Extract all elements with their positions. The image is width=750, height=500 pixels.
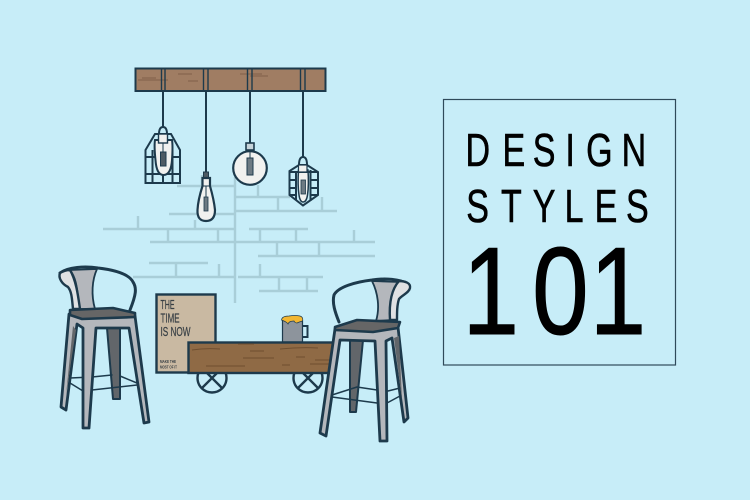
right stool rungs (332, 387, 400, 403)
hanging lamp: slim bulb (197, 91, 215, 221)
hanging lamp: round cage bulb (290, 91, 318, 206)
poster headline: THE (160, 298, 174, 312)
right stool seat (335, 320, 400, 332)
right stool frame and legs (320, 327, 408, 441)
right stool back leg (350, 340, 363, 412)
brick wall (103, 175, 375, 303)
mug with foam (282, 316, 308, 342)
hanging lamp: globe bulb (233, 91, 267, 185)
left stool frame and legs (61, 314, 149, 428)
poster small print: MOST OF IT (160, 364, 177, 370)
title: styles: STYLES (466, 180, 649, 232)
right cart wheel (294, 364, 322, 392)
title: design: DESIGN (465, 124, 646, 176)
title: 101: 101 (462, 222, 646, 361)
right stool backrest (333, 279, 408, 322)
hanging lamp: caged bulb left (146, 91, 180, 183)
poster small print (160, 359, 177, 370)
poster (156, 294, 216, 372)
left cart wheel (198, 364, 226, 392)
right bar stool (320, 279, 410, 441)
poster headline: IS NOW (160, 325, 191, 339)
wooden cart table (188, 342, 334, 373)
poster headline (160, 298, 191, 339)
title box (444, 100, 676, 365)
left stool rungs (70, 375, 137, 391)
left stool backrest (60, 267, 135, 310)
poster headline: TIME (160, 312, 180, 326)
wooden ceiling beam (136, 68, 326, 91)
left stool back leg (107, 328, 120, 399)
left stool seat (70, 308, 135, 319)
left bar stool (59, 267, 149, 428)
poster small print: MAKE THE (160, 359, 176, 364)
